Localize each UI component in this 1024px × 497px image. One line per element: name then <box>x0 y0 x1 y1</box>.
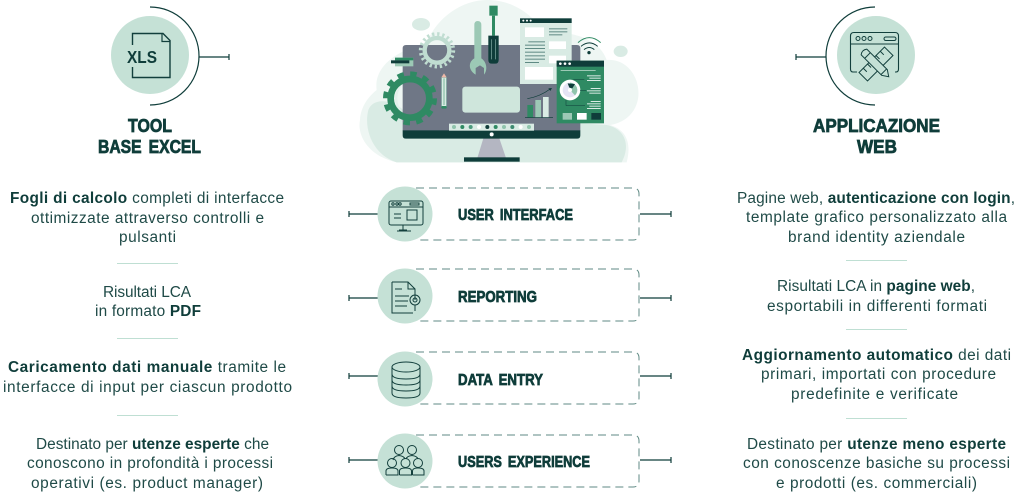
text block: left reporting: Risultati LCA <box>103 284 192 301</box>
background blobs <box>359 0 638 162</box>
label: Users experience: USERS EXPERIENCE <box>458 454 590 471</box>
screwdriver <box>488 6 499 64</box>
heading: Applicazione web: WEB <box>857 137 897 157</box>
text block: right users experience: con conoscenze basiche su processi <box>743 455 1010 472</box>
text block: left users experience: Destinato per utenze esperte che <box>36 436 269 453</box>
pencil <box>441 73 447 109</box>
text block: right users experience: e prodotti (es. commerciali) <box>776 475 977 492</box>
green dashboard window <box>557 61 604 123</box>
icon: monitor <box>389 201 423 231</box>
small flag <box>391 58 413 66</box>
row: Data entry <box>349 352 671 406</box>
icon: XLS file: XLS <box>127 47 157 67</box>
text block: left user interface: ottimizzate attraverso controlli e <box>31 210 264 227</box>
text block: left users experience <box>27 436 273 492</box>
heading: Applicazione web <box>813 116 940 157</box>
icon: database <box>392 362 420 398</box>
label: User interface: USER INTERFACE <box>458 207 573 224</box>
icon: group of users <box>386 446 424 475</box>
icon: XLS file <box>111 16 189 94</box>
text block: right user interface <box>737 190 1015 246</box>
text block: right user interface: brand identity aziendale <box>788 229 965 246</box>
text block: right data entry: primari, importati con procedure <box>761 366 996 383</box>
panel: web application header <box>796 7 940 157</box>
toolbar dots <box>449 124 534 131</box>
row: Reporting <box>349 268 671 324</box>
row: Users experience <box>349 434 671 488</box>
text block: right users experience <box>743 436 1010 492</box>
wifi icon <box>578 38 601 54</box>
light gear <box>421 34 453 67</box>
text block: left users experience: conoscono in profondità i processi <box>27 455 273 472</box>
monitor <box>403 45 580 162</box>
heading: Applicazione web: APPLICAZIONE <box>813 116 940 136</box>
text block: left data entry: interfacce di input per ciascun prodotto <box>3 379 292 396</box>
connector: Excel arc <box>150 7 229 105</box>
text block: right data entry: predefinite e verificate <box>791 386 958 403</box>
bar chart <box>525 88 553 118</box>
heading: Tool base Excel: BASE EXCEL <box>98 137 201 157</box>
wrench <box>470 21 486 75</box>
text block: right data entry: Aggiornamento automatico dei dati <box>742 347 1011 364</box>
text block: right reporting: esportabili in differenti formati <box>767 298 987 315</box>
text block: right data entry <box>742 347 1011 403</box>
text block: left reporting <box>95 284 201 320</box>
text block: left data entry <box>3 359 292 396</box>
text block: left user interface: pulsanti <box>119 229 176 246</box>
illustration: computer with tools <box>359 0 638 162</box>
label: Reporting: REPORTING <box>458 289 537 306</box>
text block: right users experience: Destinato per utenze meno esperte <box>747 436 1006 453</box>
row: User interface <box>349 186 671 242</box>
text block: right reporting <box>767 278 987 315</box>
text block: left user interface: Fogli di calcolo completi di interfacce <box>10 190 284 207</box>
text block: right user interface: Pagine web, autenticazione con login, <box>737 190 1015 207</box>
icon: document with gear <box>392 282 420 313</box>
heading: Tool base Excel: TOOL <box>128 116 172 136</box>
text block: right user interface: template grafico personalizzato alla <box>746 209 1007 226</box>
text block: left data entry: Caricamento dati manuale tramite le <box>8 359 286 376</box>
label: Data entry: DATA ENTRY <box>458 372 544 389</box>
text block: left users experience: operativi (es. product manager) <box>31 475 263 492</box>
panel: Excel tool header <box>98 7 229 157</box>
dark green gear <box>386 74 434 122</box>
text block: left reporting: in formato PDF <box>95 303 201 320</box>
icon: browser with tools <box>837 16 915 94</box>
connector: web arc <box>796 7 875 105</box>
text block: left user interface <box>10 190 284 246</box>
heading: Tool base Excel <box>98 116 201 157</box>
text block: right reporting: Risultati LCA in pagine web, <box>777 278 975 295</box>
document window <box>520 18 572 84</box>
